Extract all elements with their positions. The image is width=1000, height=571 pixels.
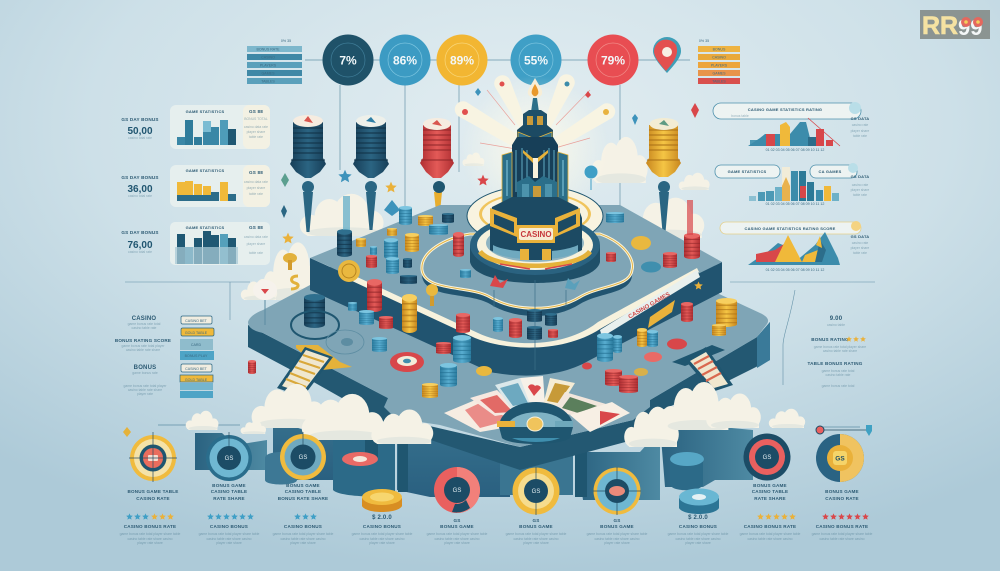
column text 4: game bonus rate total player share table — [352, 532, 412, 536]
column text 2: BONUS GAME — [212, 483, 246, 488]
roulette wheel — [497, 402, 573, 444]
column text 1: BONUS GAME TABLE — [127, 489, 179, 494]
column text 3: BONUS RATE SHARE — [278, 496, 328, 501]
column text 1: casino table rate share casino — [127, 537, 173, 541]
middle-right text: casino table rate — [826, 373, 851, 377]
middle-right text: TABLE BONUS RATING — [808, 361, 863, 366]
right chart 2: casino rate — [852, 183, 868, 187]
column text 6: player rate share — [523, 541, 549, 545]
casino sign — [517, 225, 555, 243]
column text 3 — [273, 483, 333, 545]
percentage circle 5: 79% — [601, 54, 625, 68]
left bar chart 3: GAME STATISTICS — [186, 225, 225, 230]
ticket: left — [277, 345, 352, 397]
middle-left text: casino table rate — [132, 326, 157, 330]
percentage circle 5 — [588, 34, 638, 86]
column text 2: CASINO BONUS — [210, 524, 248, 529]
left bar chart 2: casino data rate — [244, 180, 268, 184]
column text 10: game bonus rate total player share table — [812, 532, 872, 536]
right chart 3: player share — [851, 246, 869, 250]
left chart 3 label — [121, 230, 159, 254]
left chart 3 label: casino total rate — [128, 250, 152, 254]
right chart 2: table rate — [853, 193, 867, 197]
middle-right text: game bonus rate total — [822, 384, 855, 388]
left bar chart 2: table rate — [249, 192, 263, 196]
gauge 7: GS — [763, 455, 771, 461]
column text 8: casino table rate share casino — [675, 537, 721, 541]
column text 8: player rate share — [685, 541, 711, 545]
column text 10: CASINO RATE — [825, 496, 859, 501]
left chart 2 label: casino total rate — [128, 194, 152, 198]
gauge 2: GS — [225, 456, 233, 462]
middle-left tag stack: CARD — [191, 343, 201, 347]
legend bars: top left: CASINO — [261, 56, 275, 60]
left bar chart 3: casino data rate — [244, 235, 268, 239]
clouds in front — [186, 382, 805, 449]
right chart 1: player share — [851, 129, 869, 133]
poker chip stacks — [248, 206, 737, 398]
middle-left text: game bonus rate total — [128, 322, 161, 326]
middle-right text: game bonus rate total — [822, 369, 855, 373]
column text 8 — [668, 515, 728, 545]
column text 3: player rate share — [290, 541, 316, 545]
casino tower — [490, 78, 582, 260]
column text 5 — [427, 518, 487, 545]
left chart 2 label: GS DAY BONUS — [121, 175, 159, 180]
middle-left tag stack: GOLD TABLE — [185, 378, 208, 382]
middle-left text: BONUS RATING SCORE — [115, 338, 171, 343]
column text 9: casino table rate share casino — [747, 537, 793, 541]
column text 5: GS — [453, 518, 461, 523]
column text 3: CASINO BONUS — [284, 524, 322, 529]
column text 3: casino table rate share casino — [280, 537, 326, 541]
middle-left text: casino table rate share — [126, 348, 160, 352]
rays behind tower — [455, 74, 615, 150]
chip: blue flat — [679, 488, 719, 514]
column text 6: game bonus rate total player share table — [506, 532, 566, 536]
column text 10: BONUS GAME — [825, 489, 859, 494]
right chart 2: player share — [851, 188, 869, 192]
middle-left text — [115, 316, 171, 396]
left bar chart 1: BONUS TOTAL — [244, 117, 268, 121]
left chart 1 label: casino total rate — [128, 136, 152, 140]
percentage circle 4 — [510, 34, 562, 86]
gauge 1 — [123, 427, 177, 482]
left bar chart 3: table rate — [249, 251, 263, 255]
right chart 3: table rate — [853, 251, 867, 255]
chip tower: gold — [646, 118, 681, 232]
column text 9: RATE SHARE — [754, 496, 786, 501]
column text 3: game bonus rate total player share table — [273, 532, 333, 536]
left chart 3 label: GS DAY BONUS — [121, 230, 159, 235]
right chart 1 — [713, 102, 869, 152]
legend bars: top left: PLAYERS — [260, 64, 277, 68]
gauge 5 — [512, 467, 560, 515]
ticket: right — [672, 345, 733, 392]
column text 8: $ 2.0.0 — [688, 515, 708, 521]
column text 7 — [587, 518, 647, 545]
percentage circle 3 — [436, 34, 488, 86]
left chart 2 label: 36,00 — [127, 184, 153, 195]
disk behind tower — [467, 186, 603, 246]
scatter stars and sparkles — [281, 88, 703, 290]
column text 6: BONUS GAME — [519, 524, 553, 529]
percentage circle 3: 89% — [450, 54, 474, 68]
ribbon on platform — [600, 270, 700, 337]
column text 2 — [199, 483, 259, 545]
clouds behind platform — [241, 137, 710, 302]
legend bars: top right: 0% 35 — [699, 39, 709, 43]
gauge 3: GS — [299, 455, 307, 461]
middle-right text — [808, 316, 866, 388]
right chart 1: 01 02 03 04 05 06 07 08 09 10 11 12 — [766, 148, 824, 152]
column text 1: CASINO RATE — [136, 496, 170, 501]
card fan — [444, 376, 630, 444]
column text 4: CASINO BONUS — [363, 524, 401, 529]
middle-left tag stack: GOLD TABLE — [185, 331, 208, 335]
column text 7: player rate share — [604, 541, 630, 545]
right chart 2: 01 02 03 04 05 06 07 08 09 10 11 12 — [766, 202, 824, 206]
left bar chart 2: player share — [247, 186, 265, 190]
right chart 3: 01 02 03 04 05 06 07 08 09 10 11 12 — [766, 268, 824, 272]
percentage circle 1: 7% — [339, 54, 357, 68]
right chart 2: GS DATA — [851, 174, 869, 179]
legend bars: top right: BONUS — [713, 48, 726, 52]
column text 5: casino table rate share casino — [434, 537, 480, 541]
right chart 2 — [715, 163, 869, 206]
column text 9: game bonus rate total player share table — [740, 532, 800, 536]
column text 5: player rate share — [444, 541, 470, 545]
column text 8: game bonus rate total player share table — [668, 532, 728, 536]
gauge 8 — [816, 425, 872, 482]
middle-right text: casino table — [827, 323, 845, 327]
right chart 3: CASINO GAME STATISTICS RATING SCORE — [744, 226, 836, 231]
chip tower: red — [420, 118, 454, 212]
upper tier — [310, 205, 722, 376]
legend bars: top left — [247, 39, 302, 84]
column text 4: casino table rate share casino — [359, 537, 405, 541]
right chart 1: CASINO GAME STATISTICS RATING — [748, 107, 822, 112]
left bar chart 2: GAME STATISTICS — [186, 168, 225, 173]
logo: RR99: RR — [922, 12, 958, 40]
middle-left text: game bonus rate total player — [124, 384, 167, 388]
percentage circle 4: 55% — [524, 54, 548, 68]
left chart 2 label — [121, 175, 159, 198]
icon: map pin — [653, 37, 681, 73]
legend bars: top left: BONUS RATE — [256, 48, 280, 52]
casino sign: CASINO — [520, 230, 552, 239]
middle-left text: player rate — [137, 392, 153, 396]
middle-left tag stack: CASINO BET — [185, 367, 208, 371]
column text 3: BONUS GAME — [286, 483, 320, 488]
left bar chart 1: player share — [247, 130, 265, 134]
legend bars: top right: PLAYERS — [711, 64, 728, 68]
gauge 8: GS — [835, 456, 845, 462]
chip: gold — [362, 489, 402, 512]
right chart 1: GS DATA — [851, 116, 869, 121]
middle-left text: BONUS — [134, 365, 156, 371]
column text 7: game bonus rate total player share table — [587, 532, 647, 536]
middle-left text: game bonus rate total player — [122, 344, 165, 348]
middle-left text: casino table rate share — [128, 388, 162, 392]
middle-right text: casino table rate share — [823, 349, 857, 353]
right chart 1: bonus table — [731, 114, 749, 118]
left bar chart 3: player share — [247, 242, 265, 246]
chip tower: navy middle — [353, 115, 389, 230]
legend bars: top right: GAMES — [713, 72, 726, 76]
left chart 3 label: 76,00 — [127, 240, 153, 251]
column text 6: GS — [532, 518, 540, 523]
middle-right text: game bonus rate total player share — [814, 345, 866, 349]
column text 2: casino table rate share casino — [206, 537, 252, 541]
left bar chart 1: GS 88 — [249, 109, 263, 114]
column text 7: BONUS GAME — [600, 524, 634, 529]
column text 7: casino table rate share casino — [594, 537, 640, 541]
middle-left tag stack: CASINO BET — [185, 319, 208, 323]
column text 7: GS — [613, 518, 621, 523]
ribbon on platform: CASINO GAMES — [628, 292, 671, 320]
left bar chart 3: GS 88 — [249, 225, 263, 230]
column text 1: player rate share — [137, 541, 163, 545]
column text 4 — [352, 515, 412, 545]
column text 2: player rate share — [216, 541, 242, 545]
chip: coral cylinder — [342, 452, 378, 494]
middle-left text: game bonus rate — [132, 371, 158, 375]
right chart 1: table rate — [853, 134, 867, 138]
column text 10: casino table rate share casino — [819, 537, 865, 541]
bottom wall blocks — [195, 423, 753, 500]
tower glow — [460, 75, 610, 225]
left chart 1 label: GS DAY BONUS — [121, 117, 159, 122]
right chart 2: GAME STATISTICS — [728, 169, 767, 174]
gauge 3 — [280, 432, 326, 480]
middle-left tag stack: BONUS PLAY — [185, 354, 208, 358]
right chart 2: CA GAMES — [818, 169, 842, 174]
right chart 1: casino rate — [852, 123, 868, 127]
column text 4: player rate share — [369, 541, 395, 545]
column text 5: game bonus rate total player share table — [427, 532, 487, 536]
tower base drum — [470, 215, 600, 283]
percentage circle 1 — [322, 34, 374, 86]
column text 9: CASINO BONUS RATE — [744, 524, 796, 529]
logo: RR99 — [920, 10, 990, 40]
column text 4: $ 2.0.0 — [372, 515, 392, 521]
lower platform — [248, 262, 770, 470]
legend bars: top right: TABLES — [712, 80, 726, 84]
percentage circle 2: 86% — [393, 54, 417, 68]
column text 9: CASINO TABLE — [752, 489, 788, 494]
right chart 3: casino rate — [852, 241, 868, 245]
column text 8: CASINO BONUS — [679, 524, 717, 529]
gauge 4: GS — [453, 488, 461, 494]
flat chips and markers — [253, 236, 687, 376]
percentage circle 2 — [380, 34, 430, 86]
left bar chart 1: casino data rate — [244, 125, 268, 129]
left bar chart 1: GAME STATISTICS — [186, 109, 225, 114]
middle-right text: BONUS RATING — [811, 337, 849, 342]
middle-right text: 9.00 — [830, 316, 843, 322]
gauge 5: GS — [532, 489, 540, 495]
gauge 2 — [206, 432, 252, 481]
column text 1 — [120, 489, 180, 545]
column text 10 — [812, 489, 872, 541]
connector lines — [125, 60, 875, 427]
chip: blue cylinder — [670, 452, 704, 490]
legend bars: top left: 0% 35 — [281, 39, 291, 43]
legend bars: top right — [698, 39, 740, 84]
column text 5: BONUS GAME — [440, 524, 474, 529]
left bar chart 1 — [170, 105, 270, 149]
gauge 6 — [593, 467, 641, 515]
curved plate around tower — [422, 234, 633, 316]
column text 6: casino table rate share casino — [513, 537, 559, 541]
column text 9 — [740, 483, 800, 541]
column text 2: CASINO TABLE — [211, 489, 247, 494]
left chart 1 label — [121, 117, 159, 140]
column text 6 — [506, 518, 566, 545]
gauge 7 — [744, 434, 790, 480]
chip tower: navy left — [290, 115, 326, 232]
legend bars: top left: TABLES — [261, 80, 275, 84]
left bar chart 1: table rate — [249, 135, 263, 139]
legend bars: top left: GAMES — [262, 72, 275, 76]
column text 1: CASINO BONUS RATE — [124, 524, 176, 529]
left chart 1 label: 50,00 — [127, 126, 153, 137]
legend bars: top right: CASINO — [712, 56, 726, 60]
gauge 4 — [434, 467, 480, 513]
column text 2: RATE SHARE — [213, 496, 245, 501]
middle-left text: CASINO — [132, 316, 156, 322]
logo: RR99: 99 — [958, 15, 982, 40]
column text 10: CASINO BONUS RATE — [816, 524, 868, 529]
left bar chart 2: GS 88 — [249, 170, 263, 175]
left bar chart 2 — [170, 165, 270, 207]
right chart 3 — [720, 221, 869, 272]
column text 2: game bonus rate total player share table — [199, 532, 259, 536]
middle-left tag stack — [180, 316, 214, 398]
right chart 3: GS DATA — [851, 234, 869, 239]
column text 9: BONUS GAME — [753, 483, 787, 488]
column text 1: game bonus rate total player share table — [120, 532, 180, 536]
column text 3: CASINO TABLE — [285, 489, 321, 494]
left bar chart 3 — [170, 222, 270, 265]
